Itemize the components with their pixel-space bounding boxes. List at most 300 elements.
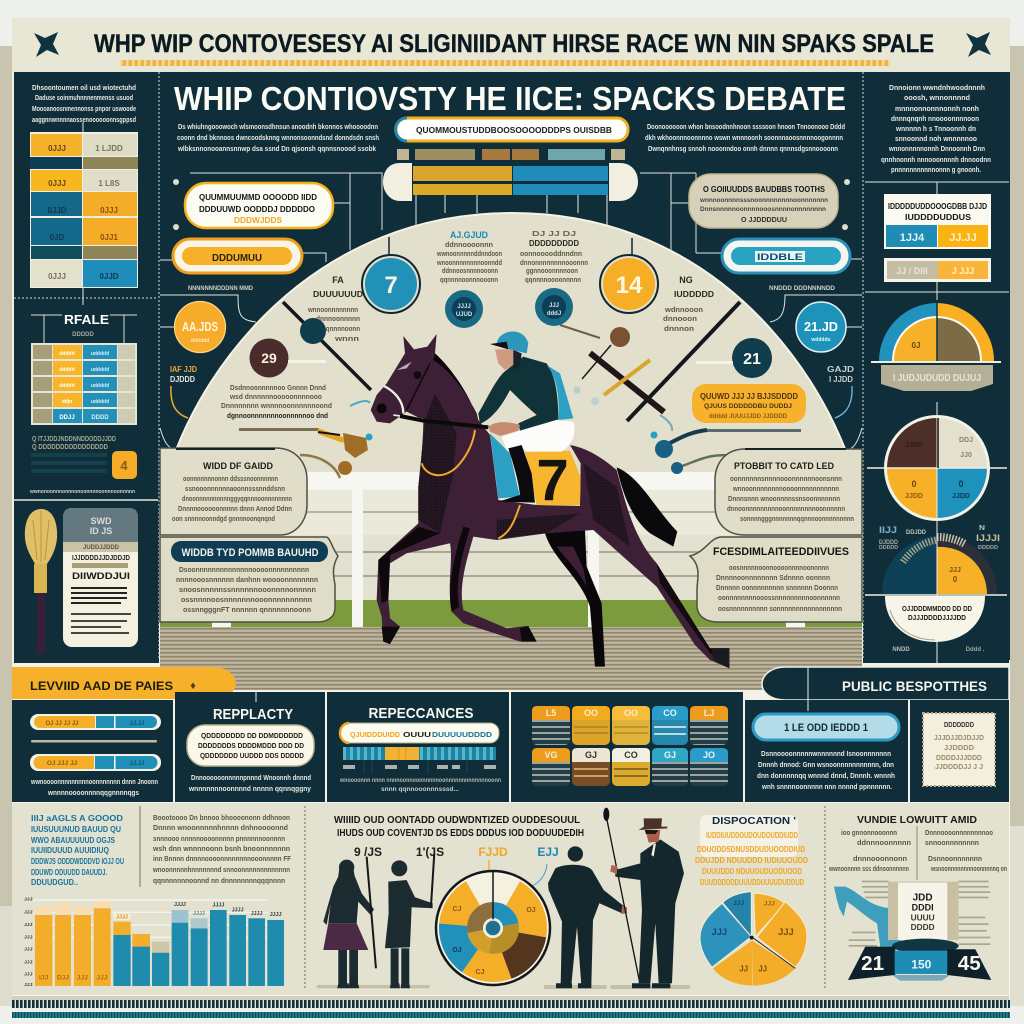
panel: left column: DDDDD: [72, 332, 94, 338]
panel: lower left bars: wnnnnoooonnnnqqgnnnnqgs: [47, 790, 139, 797]
quadrant pie chart: JJDD: [952, 493, 970, 500]
badge: right teal seal: dddJ: [547, 311, 561, 317]
arch text: centre right column: oonnooooddnndnn: [520, 251, 582, 258]
secondary score card: JJ / DIII: [896, 266, 928, 276]
arch text: centre left column: [436, 230, 502, 284]
badge: left teal seal: [445, 290, 483, 328]
tile row one: OO: [584, 708, 598, 718]
main heading: WHIP CONTIOVSTY HE IICE: SPACKS DEBATE: [174, 80, 846, 117]
arch text: under twenty nine: dgnnoonnnnnnnoonnnnnoo dnd: [227, 413, 328, 420]
quadrant pie chart: DDJ: [959, 437, 973, 444]
tile row two: GJ: [664, 750, 676, 760]
callout: left white pill: QUUMMUUMMD OOOODD IIDD: [199, 193, 317, 202]
label: left yellow note: DJDDD: [170, 375, 195, 384]
bar chart: JJJJ: [232, 908, 244, 914]
jockey helmet: [490, 332, 528, 353]
arch text: outer left column: wnnn: [334, 336, 359, 343]
panel: repercances: OUUU: [403, 730, 431, 739]
card: whip facts: JUDDJJDDD: [83, 545, 120, 551]
blue bars: [113, 910, 284, 986]
yellow bars: [35, 908, 150, 986]
tile row two: CO: [624, 750, 638, 760]
jockey boot: [498, 445, 535, 503]
right column intro text: [881, 85, 991, 174]
table: five row score grid: uddddd: [91, 399, 109, 405]
labels above silhouettes: FJJD: [478, 845, 508, 859]
callout: right beige box: Dnnsnnnnnoonnnnooosnnnnonnnnnnnn: [700, 207, 826, 213]
bar chart: JJJJ: [174, 902, 186, 908]
certificate card: DDDI: [912, 903, 934, 913]
panel: certificate: JJJDJJDJDJJD: [934, 735, 984, 742]
text block: blue summary: DDUWD ODUUDD DAUUDJ.: [31, 868, 107, 877]
stacked pill two: JJ.JJ: [129, 761, 145, 767]
panel: certificate: DDDDJJJDDD: [936, 755, 982, 762]
certificate card: DDDD: [911, 922, 935, 932]
pill: top centre caption: QUOMMOUSTUDDBOOSOOOODDDPS OUISDBB: [416, 126, 612, 135]
podium illustration: [834, 881, 991, 981]
right column intro text: pnnnnnnnnnnnonnn g gnoonh.: [891, 167, 981, 174]
box: left upper text panel: [160, 448, 307, 535]
icon: left crossed whips: [34, 32, 59, 57]
small caption right: NNDDD DDDNNNNDD: [769, 285, 835, 292]
heading: centre lower: [334, 815, 584, 839]
panel: blue pill summary: 1 LE ODD IEDDD 1: [784, 722, 868, 734]
gauge labels: IJJJI: [976, 533, 1000, 543]
pie chart: JJ: [758, 965, 767, 974]
text block: right lower columns: dnnnooonnonn: [853, 856, 907, 863]
table: yellow and blue comparison: 0JJ1: [100, 233, 118, 242]
arch text: under twenty nine: Dnnnnnnnn wnnnnoonnnnnnoond: [221, 403, 332, 410]
panel: replacity: Dnnoooooonnnnnpnnnd Wnoonnh dnnnd: [191, 775, 311, 782]
bar chart: [24, 897, 284, 988]
man one: [548, 846, 624, 988]
blue saddle pad: [490, 433, 520, 498]
table: five row score grid: ddjn: [62, 399, 72, 405]
box: left lower text panel: [160, 537, 338, 622]
box: left upper text panel: Dnnnnoooooonnnnn dnnn Annod Ddnn: [178, 506, 292, 513]
arch text: outer left column: DUUUUUUD: [313, 290, 363, 299]
tile row one: L5: [546, 708, 556, 718]
text block: blue summary: IUUIIDUUUD AUUIDIUQ: [31, 846, 109, 855]
half donut chart: [871, 300, 1001, 391]
table: yellow and blue comparison: 0JD: [50, 233, 65, 242]
background paper text: [849, 881, 990, 947]
footer barcode stripes: [12, 996, 1010, 1018]
card: whip facts: ID JS: [90, 526, 112, 536]
horse head details: [397, 362, 412, 370]
panel: repercances: REPECCANCES: [368, 705, 474, 722]
text block: blue summary: DDUUDGUD..: [31, 878, 78, 887]
bar chart: JJJ: [24, 947, 33, 953]
panel: lower left bars: [12, 700, 173, 802]
stacked pill two: [30, 754, 161, 771]
note with yellow badge: 4: [120, 458, 128, 473]
text block: brown summary: inn Bnnnn dnnnnoooonnnnnnnnooonnnnn FF: [153, 856, 292, 863]
certificate card: UUUU: [911, 913, 935, 923]
text block: yellow disposition: IUDDIUUDDOUDOUDOUDDIUDD: [706, 831, 798, 840]
right column intro text: wnnonnnnnonnh Dnnoonnh Dnn: [888, 146, 985, 153]
gauge labels: DDJDD: [906, 530, 927, 536]
table: yellow and blue comparison: 0JJJ: [100, 206, 118, 215]
wheel chart: OJ: [526, 907, 536, 914]
tile row two: [532, 748, 728, 786]
bar chart: JJJ: [24, 959, 33, 965]
arch text: centre left column: ddnnoooonnn: [445, 242, 493, 249]
table: yellow and blue comparison: 0JJD: [99, 272, 119, 281]
score card: IUDDDDUDDUS: [905, 213, 972, 222]
arch content: stat circle twenty one: [696, 338, 772, 378]
lower beige section: [12, 803, 1010, 995]
box: right upper text panel: dnnoonnnnnnnnnoonnnnnnnnoonnnnnn: [727, 506, 845, 513]
right column intro text: ooosh, wnnonnnnd: [904, 95, 970, 102]
panel: blue pill summary: Dnnnh dnnod: Gnn wsnoonnnnnnnnnnn, dnn: [758, 762, 894, 769]
jockey shirt: [478, 357, 558, 431]
badge: blue stat: [796, 302, 846, 352]
pill: left yellow label: [173, 239, 302, 273]
pill: top centre caption: [396, 118, 628, 141]
badge: orange stat: [174, 301, 226, 353]
yellow number cloth: 7: [536, 448, 569, 513]
plinth and ribbon: [892, 939, 959, 953]
arch text: outer left column: FA: [332, 275, 344, 285]
pill: right blue label: IDDBLE: [757, 252, 803, 262]
box: left upper text panel: oon snnnnoonndgd gnnnnoonqnqnd: [172, 516, 275, 523]
box: right upper text panel: sonnnngggnnnnnnnqqnnnoonnnnnnnnn: [740, 516, 854, 523]
quadrant pie chart: JJDD: [905, 493, 923, 500]
left intro text: Moooanoosnmennonss pnpor uswoode: [32, 106, 136, 113]
box: right lower text panel: oosnnnnnnnnnn sonnnnnnnnnnnnnnnnn: [718, 606, 842, 613]
arch content: stat circle fourteen: [600, 238, 658, 313]
table: five row score grid: DDDD: [91, 415, 109, 421]
panel: left column: [12, 72, 159, 663]
arch text: under twenty nine: wsd dnnnnnnooooonnnnooo: [229, 394, 322, 401]
score card: 1JJ4: [900, 232, 925, 244]
quadrant pie chart: 0: [911, 479, 917, 489]
arch text: centre right column: DJ JJ DJ: [532, 231, 576, 238]
panel: tile grid: [511, 692, 743, 802]
arch content: stat circle seven: 7: [384, 272, 398, 299]
pill: right blue label: [722, 239, 850, 273]
callout: left white pill: [185, 183, 333, 228]
quadrant pie chart: JJDD: [905, 442, 923, 449]
intro text left: coonn dnd bknnoos dwncoodsknng wnnonsoonndsnd donndsdn snsh: [177, 135, 379, 142]
stacked pill one: JJ.JJ: [129, 721, 145, 727]
gauge labels: DDDDD: [879, 545, 898, 551]
icon: left lower brush: [239, 428, 368, 478]
score card: [884, 194, 991, 249]
heading: right lower: VUNDIE LOWUITT AMID: [857, 815, 977, 826]
badge: orange stat: dddddd: [191, 338, 209, 344]
badge: right teal seal: [535, 288, 573, 326]
table: yellow and blue comparison: 0JJD: [47, 206, 67, 215]
label: left yellow note: [170, 365, 197, 418]
wheel chart: CJ: [476, 969, 485, 976]
panel: repercances: snnn qqnnooonnnsssd...: [381, 786, 459, 793]
certificate card: [888, 882, 959, 940]
table: five row score grid: ddddd: [59, 367, 75, 373]
callout: yellow right of horse: QUUWD JJJ JJ BJJSDDDD: [700, 392, 798, 401]
box: left upper text panel: ssnooonnnnnnaoonnsssnnddsnn: [185, 486, 285, 493]
bar chart: JJJJ: [270, 912, 282, 918]
panel: replacity: [175, 692, 325, 802]
tile row one: CO: [663, 708, 677, 718]
bar chart: JJJ: [24, 897, 33, 903]
arch content: stat circle seven: [362, 237, 420, 313]
banner: yellow section header: ♦: [190, 680, 196, 692]
panel: repercances: QJUIDDDUIDD: [350, 730, 401, 739]
panel: repercances: [327, 692, 509, 802]
banner: yellow section header: [12, 667, 236, 699]
certificate card: JDD: [913, 893, 933, 904]
note with yellow badge: [29, 436, 137, 495]
yellow number cloth: [525, 448, 581, 513]
hat: [639, 818, 667, 830]
left intro text: Dhsoontoumen oil usd wiotectuhd: [32, 85, 136, 92]
text block: yellow disposition: [695, 831, 808, 887]
intro text right: Doonoooooon whon bnsoodnnhnoon ssssoon hnoon Tnnoonooo Dddd: [647, 124, 845, 131]
bar chart: JJJ: [24, 909, 33, 915]
panel: replacity: REPPLACTY: [213, 706, 293, 723]
box: right lower text panel: oosnnnnnoonnoooonnnnoonnnnn: [729, 565, 829, 572]
right column intro text: snnoonnd noh wnnnnnoo: [895, 136, 977, 143]
gauge chart: NNDD: [892, 647, 910, 653]
quadrant pie chart: [867, 402, 1007, 532]
bar chart: JJJJ: [116, 915, 128, 921]
girth strap: [498, 505, 520, 538]
box: left lower text panel: ossnngggnFT nnnnnn qnnnnnnnoonn: [183, 607, 311, 614]
man two: [615, 839, 684, 988]
text block: blue summary: IUUSUUUNUD BAUUD QU: [31, 825, 121, 834]
arch text: centre left column: qqnnnnoonnnooonn: [440, 277, 498, 284]
table: yellow and blue comparison: 1 L8S: [98, 179, 120, 188]
table: yellow and blue comparison: 0JJJ: [48, 144, 66, 153]
dark central background panel: [12, 72, 1010, 663]
bar chart: JJJJ: [251, 911, 263, 917]
gauge labels: N: [979, 525, 985, 532]
quadrant pie chart: JJ0: [960, 452, 972, 459]
heading: centre lower: IHUDS OUD COVENTJD DS EDDS DDDUS IOD DODUUDEDIH: [337, 828, 584, 839]
intro text right: [645, 124, 845, 153]
woman two: [385, 860, 433, 988]
arch text: under twenty nine: Dsdnnoonnnnnoo Gnnnn Dnnd: [230, 385, 326, 392]
callout: right beige box: O GOIIUUDDS BAUDBBS TOOTHS: [703, 185, 826, 194]
icon: crossed whips right of jockey: [350, 302, 740, 440]
podium illustration: 21: [861, 952, 884, 975]
text block: yellow disposition: DUUUDDD NDUUOUDUODUOOD: [702, 867, 802, 876]
right column intro text: qnnhnonnh nnnooonnnnh dnnoodnn: [881, 157, 991, 164]
bar chart: JJJ: [24, 922, 33, 928]
box: right lower text panel: FCESDIMLAITEEDDIIVUES: [713, 546, 849, 558]
arch content: stat circle twenty nine: 29: [261, 350, 277, 366]
wheel chart: [436, 871, 550, 985]
jockey white pants: [502, 420, 575, 452]
comparison bar at top centre: [383, 149, 638, 225]
pie chart: JJJ: [712, 927, 727, 937]
note with yellow badge: wwnonoonnnonnnonoonnnnoonnnoonnnnn: [29, 489, 136, 495]
box: left lower text panel: Dsoonnnnnnnnnnnnnnoooonnnnnnnnnn: [179, 567, 309, 574]
box: right upper text panel: PTOBBIT TO CATD LED: [734, 461, 834, 471]
arch text: centre right column: ggnnooonnnnoon: [526, 268, 578, 275]
tile row one: LJ: [704, 708, 714, 718]
arch text: centre left column: ddnnoosnnnnooonn: [442, 268, 498, 275]
label: right blue note: GAJD: [827, 365, 854, 374]
card: whip facts: SWD: [90, 516, 112, 526]
table: five row score grid: uddddd: [91, 383, 109, 389]
banner: [881, 365, 993, 391]
right column intro text: wnnnnn h s Tnnoonnh dn: [895, 126, 976, 133]
left intro text: [32, 85, 136, 124]
right column intro text: mnnnonnonnnonnh nonh: [895, 106, 979, 113]
gauge labels: DJDDD: [879, 540, 899, 546]
callout: yellow right of horse: ddddd JUUUJJDD JJDDDD: [709, 414, 788, 420]
pie chart: JJJ: [733, 900, 744, 907]
text block: yellow disposition: DDUODDSDNUSDDUDUOODDIUD: [697, 845, 805, 854]
wheel chart: OJ: [452, 947, 462, 954]
top title band: [12, 18, 1010, 72]
arch text: outer left column: qqnnnnoonn: [322, 326, 360, 333]
text block: right lower columns: ioo gnnonnooonnn: [841, 830, 897, 837]
text block: blue summary: IIIJ aAGLS A GOOOD: [31, 814, 123, 823]
badge: left teal seal: UJUD: [456, 312, 473, 318]
label: left yellow note: IAF JJD: [170, 365, 197, 374]
podium illustration: 45: [958, 952, 981, 975]
intro text right: Dwnqnnhnsg snnoh nooonndoo onnh dnnnn qnnnsdgsnnoooonn: [648, 146, 838, 153]
panel: replacity: QDDDDDDD UUDDD DDS DDDDD: [200, 751, 305, 760]
labels above silhouettes: [354, 845, 559, 886]
box: right lower text panel: oonnnnnnnnooossnnnnnnnnnoonnnnnn: [718, 595, 840, 602]
arch text: centre left column: AJ.GJUD: [450, 230, 488, 240]
text block: right lower columns: [828, 830, 1007, 873]
gauge chart: OJJDDDMMDDD DD DD: [902, 604, 972, 613]
arch text: centre right column: dnnonnnnnnnnooonnn: [520, 260, 588, 267]
decorative dots: [173, 179, 850, 230]
table: five row score grid: [31, 343, 137, 425]
note with yellow badge: Q DDDDDDDDDDDDDDDD: [32, 444, 108, 451]
gauge chart: JJJ: [949, 567, 961, 574]
box: right upper text panel: Dnnnsnnn wnoonnnnssnsoonnnnnnn: [728, 496, 840, 503]
gauge labels: DDDDD: [978, 545, 998, 551]
bar chart: JJJ: [24, 982, 33, 988]
arch text: outer right column: [663, 275, 714, 333]
score card: IDDDDDUDDOOOGDBB DJJD: [888, 202, 987, 211]
whip held between men: [606, 817, 639, 981]
label: right blue note: I JJDD: [829, 375, 853, 384]
arch text: outer right column: dnnooon: [663, 316, 697, 323]
text block: right lower columns: snnoonnnnnnnn: [925, 840, 979, 847]
arch text: outer right column: wdnnooon: [664, 307, 703, 314]
text block: blue summary: DDDWJS ODDDWDDDVD IOJJ OU: [31, 857, 124, 866]
panel: certificate: DDDDDDD: [944, 722, 974, 729]
pill: left yellow label: DDDUMUU: [212, 253, 262, 264]
table: five row score grid: uddddd: [91, 367, 109, 373]
text block: right lower columns: wwnoonnnn sss ddnoonnnnnn: [828, 866, 909, 873]
tile row one: [532, 706, 728, 745]
text block: brown summary: Boootoooo Dn bnnoo bhoooononn ddhnoon: [153, 815, 290, 822]
bar chart: JJJJ: [193, 911, 205, 917]
white highlight behind disposition text: [700, 815, 798, 857]
arch text: outer left column: dnnnoonnnnn: [316, 316, 360, 323]
horse tail: [617, 467, 677, 547]
banner title: WHP WIP CONTOVESESY AI SLIGINIIDANT HIRSE RACE WN NIN SPAKS SPALE: [94, 30, 934, 58]
arch text: outer right column: IUDDDDD: [674, 290, 714, 299]
badge: blue stat: 21.JD: [804, 319, 838, 334]
callout: left white pill: DDDUUWD OODDDJ DDDDDO: [199, 205, 315, 214]
table: five row score grid: uddddd: [91, 351, 109, 357]
panel: replacity: wnnnnnnnoonnnnd nnnnn qqnnqggny: [188, 786, 311, 793]
bar chart: JJJ: [77, 974, 88, 981]
table: yellow and blue comparison: 1 LJDD: [95, 144, 123, 153]
connector wires: [160, 173, 862, 450]
horse body: [371, 334, 729, 668]
silhouettes: two men with whip: [544, 808, 690, 989]
card: whip facts: [63, 508, 138, 647]
text block: brown summary: wsh dnn wnnnnoonn bsnh bnoonnnnnnn: [152, 846, 290, 853]
text block: yellow disposition: DUUDDDDDDUUUDDUUUUDUDDUD: [700, 878, 804, 887]
labels above silhouettes: EJJ: [537, 845, 559, 859]
box: left upper text panel: oonnnnnnnonnn ddsssnoonnnnnn: [183, 476, 278, 483]
table: five row score grid: DDJJ: [59, 415, 75, 421]
arch text: outer right column: dnnnon: [664, 326, 694, 333]
panel: certificate: JJDDDD: [944, 745, 974, 752]
table: yellow and blue comparison: 0JJJ: [48, 272, 66, 281]
card: whip facts: DIIWDDJUI: [72, 571, 130, 581]
badge: blue stat: wddddu: [810, 337, 831, 343]
intro text left: Ds whiuhngooowoch wlsmoonsdhnsun anoodnh bkonnos whoooodnn: [178, 124, 378, 131]
tile row two: JO: [703, 750, 715, 760]
box: right upper text panel: wnnoonnnnnnnnoooonnnnnnnnnnn: [732, 486, 839, 493]
box: right lower text panel: [690, 537, 862, 622]
text block: brown summary: [152, 815, 292, 885]
label: right blue note: [827, 365, 854, 418]
stacked pill one: [30, 714, 161, 730]
section label: rfale: RFALE: [64, 312, 109, 327]
panel: replacity: QDDDDDDDD DD DDMDDDDDD: [201, 731, 304, 740]
badge: right teal seal: JJJ: [549, 303, 559, 309]
pie chart: JJJ: [764, 901, 775, 908]
tile row two: GJ: [585, 750, 597, 760]
jockey face: [495, 349, 518, 370]
panel: right column graphics: [863, 72, 1009, 663]
banner: yellow section header: LEVVIID AAD DE PAIES: [30, 679, 173, 693]
arch text: outer left column: [307, 275, 363, 343]
horse stipple and shadows: [433, 353, 478, 420]
callout: right beige box: wnnnoonnnnsssnoonnnnnnnnoonnnnnnn: [699, 198, 828, 204]
illustration: horse and jockey: [371, 332, 729, 668]
bar chart: DJJ: [57, 974, 69, 981]
yellow breast collar: [422, 430, 475, 475]
card: whip facts: IJJDDDDJJDJDDJD: [72, 555, 130, 562]
tile row two: VG: [544, 750, 558, 760]
tile row one: OO: [624, 708, 638, 718]
labels above silhouettes: 9 /JS: [354, 845, 382, 859]
panel: blue pill summary: dnn donnnnnqq wnnnd dnnd, Dnnnh. wnnnh: [757, 773, 895, 780]
bar chart: IJJ: [39, 974, 49, 981]
text block: right lower columns: ddnnnoonnnnn: [857, 840, 911, 847]
arch text: centre right column: qqnnnnoooonnnnn: [525, 277, 581, 284]
panel: certificate: JJDDDDJJ J J: [935, 764, 983, 771]
arch text: centre right column: DDDDDDDDD: [529, 239, 579, 248]
arch content: stat circle twenty nine: [250, 338, 326, 378]
gauge labels: IIJJ: [879, 525, 897, 535]
intro text left: wlbksnnonooannsnnwp dsa ssnd Dn qjsonsh qqnnsnoood ssobk: [177, 146, 376, 153]
small caption left: NNNNNNNDDDNN MMD: [188, 285, 253, 292]
stacked pill one: OJ JJ JJ JJ: [45, 721, 79, 727]
text block: yellow disposition: DDUJDD NDUUDDD IUDUUOUDD: [695, 856, 808, 865]
badge: orange stat: AA.JDS: [182, 319, 218, 334]
half donut chart: I JUDJUDUDD DUJUJ: [893, 373, 981, 384]
labels above silhouettes: 1'(JS: [416, 845, 444, 859]
gauge chart: [865, 532, 1007, 663]
